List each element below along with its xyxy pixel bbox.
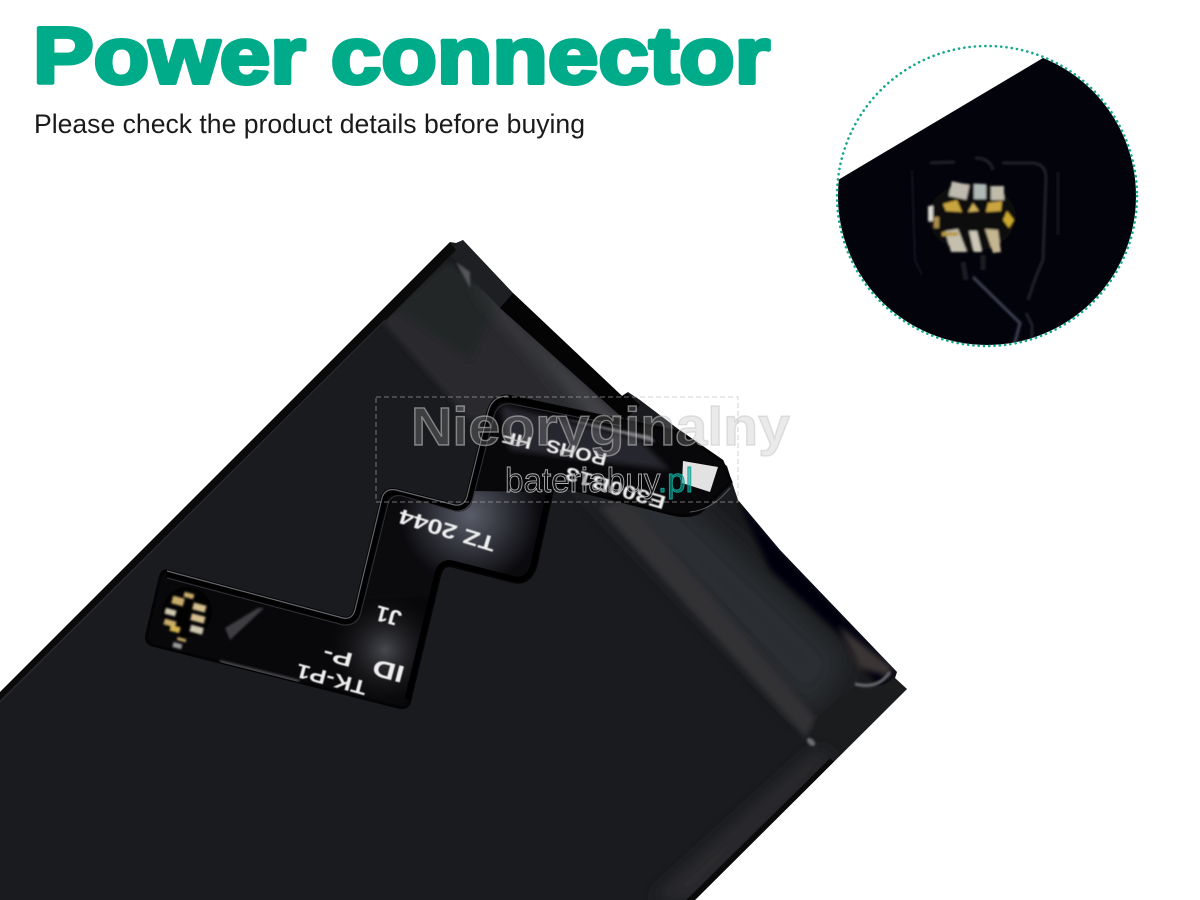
left edge rim <box>0 242 456 700</box>
dotted circle outline <box>837 46 1137 346</box>
lighter tape stripe <box>600 500 815 738</box>
connector pins <box>928 181 1016 253</box>
zoom callout: connector close-up <box>836 44 1138 348</box>
printed labels: ID <box>370 653 408 687</box>
dashed watermark frame <box>376 397 738 502</box>
title: Power connector <box>33 11 770 100</box>
raised black border <box>167 396 620 700</box>
upper tape panel <box>547 376 847 712</box>
printed labels: P- <box>321 641 355 670</box>
white sticker <box>682 461 718 492</box>
printed labels: TK-P1 <box>294 659 369 698</box>
right edge folds <box>735 495 897 690</box>
top edge highlight <box>484 292 628 420</box>
subtitle: Please check the product details before buying <box>34 109 585 139</box>
printed labels: ROHS <box>544 435 609 470</box>
gloss on TZ section <box>404 491 537 573</box>
printed labels: HF <box>500 427 534 453</box>
top corner fold <box>462 240 513 308</box>
watermark: Nieoryginalny: Nieoryginalny <box>411 397 790 457</box>
top-left tape patch <box>384 306 509 420</box>
traces <box>912 158 1058 350</box>
watermark: bateriabuy.pl: bateriabuy.pl <box>505 462 693 500</box>
printed labels: J1 <box>373 600 404 631</box>
power flex cable <box>147 396 731 720</box>
bottom edge rim <box>660 752 825 900</box>
battery body <box>0 230 920 900</box>
inner trace <box>167 404 622 625</box>
printed labels: E300B13 <box>563 462 668 512</box>
small pin connector <box>162 587 212 649</box>
black battery wedge <box>838 58 1136 345</box>
printed labels <box>294 427 668 698</box>
printed labels: TZ 2044 <box>396 504 498 555</box>
watermark <box>376 397 790 502</box>
